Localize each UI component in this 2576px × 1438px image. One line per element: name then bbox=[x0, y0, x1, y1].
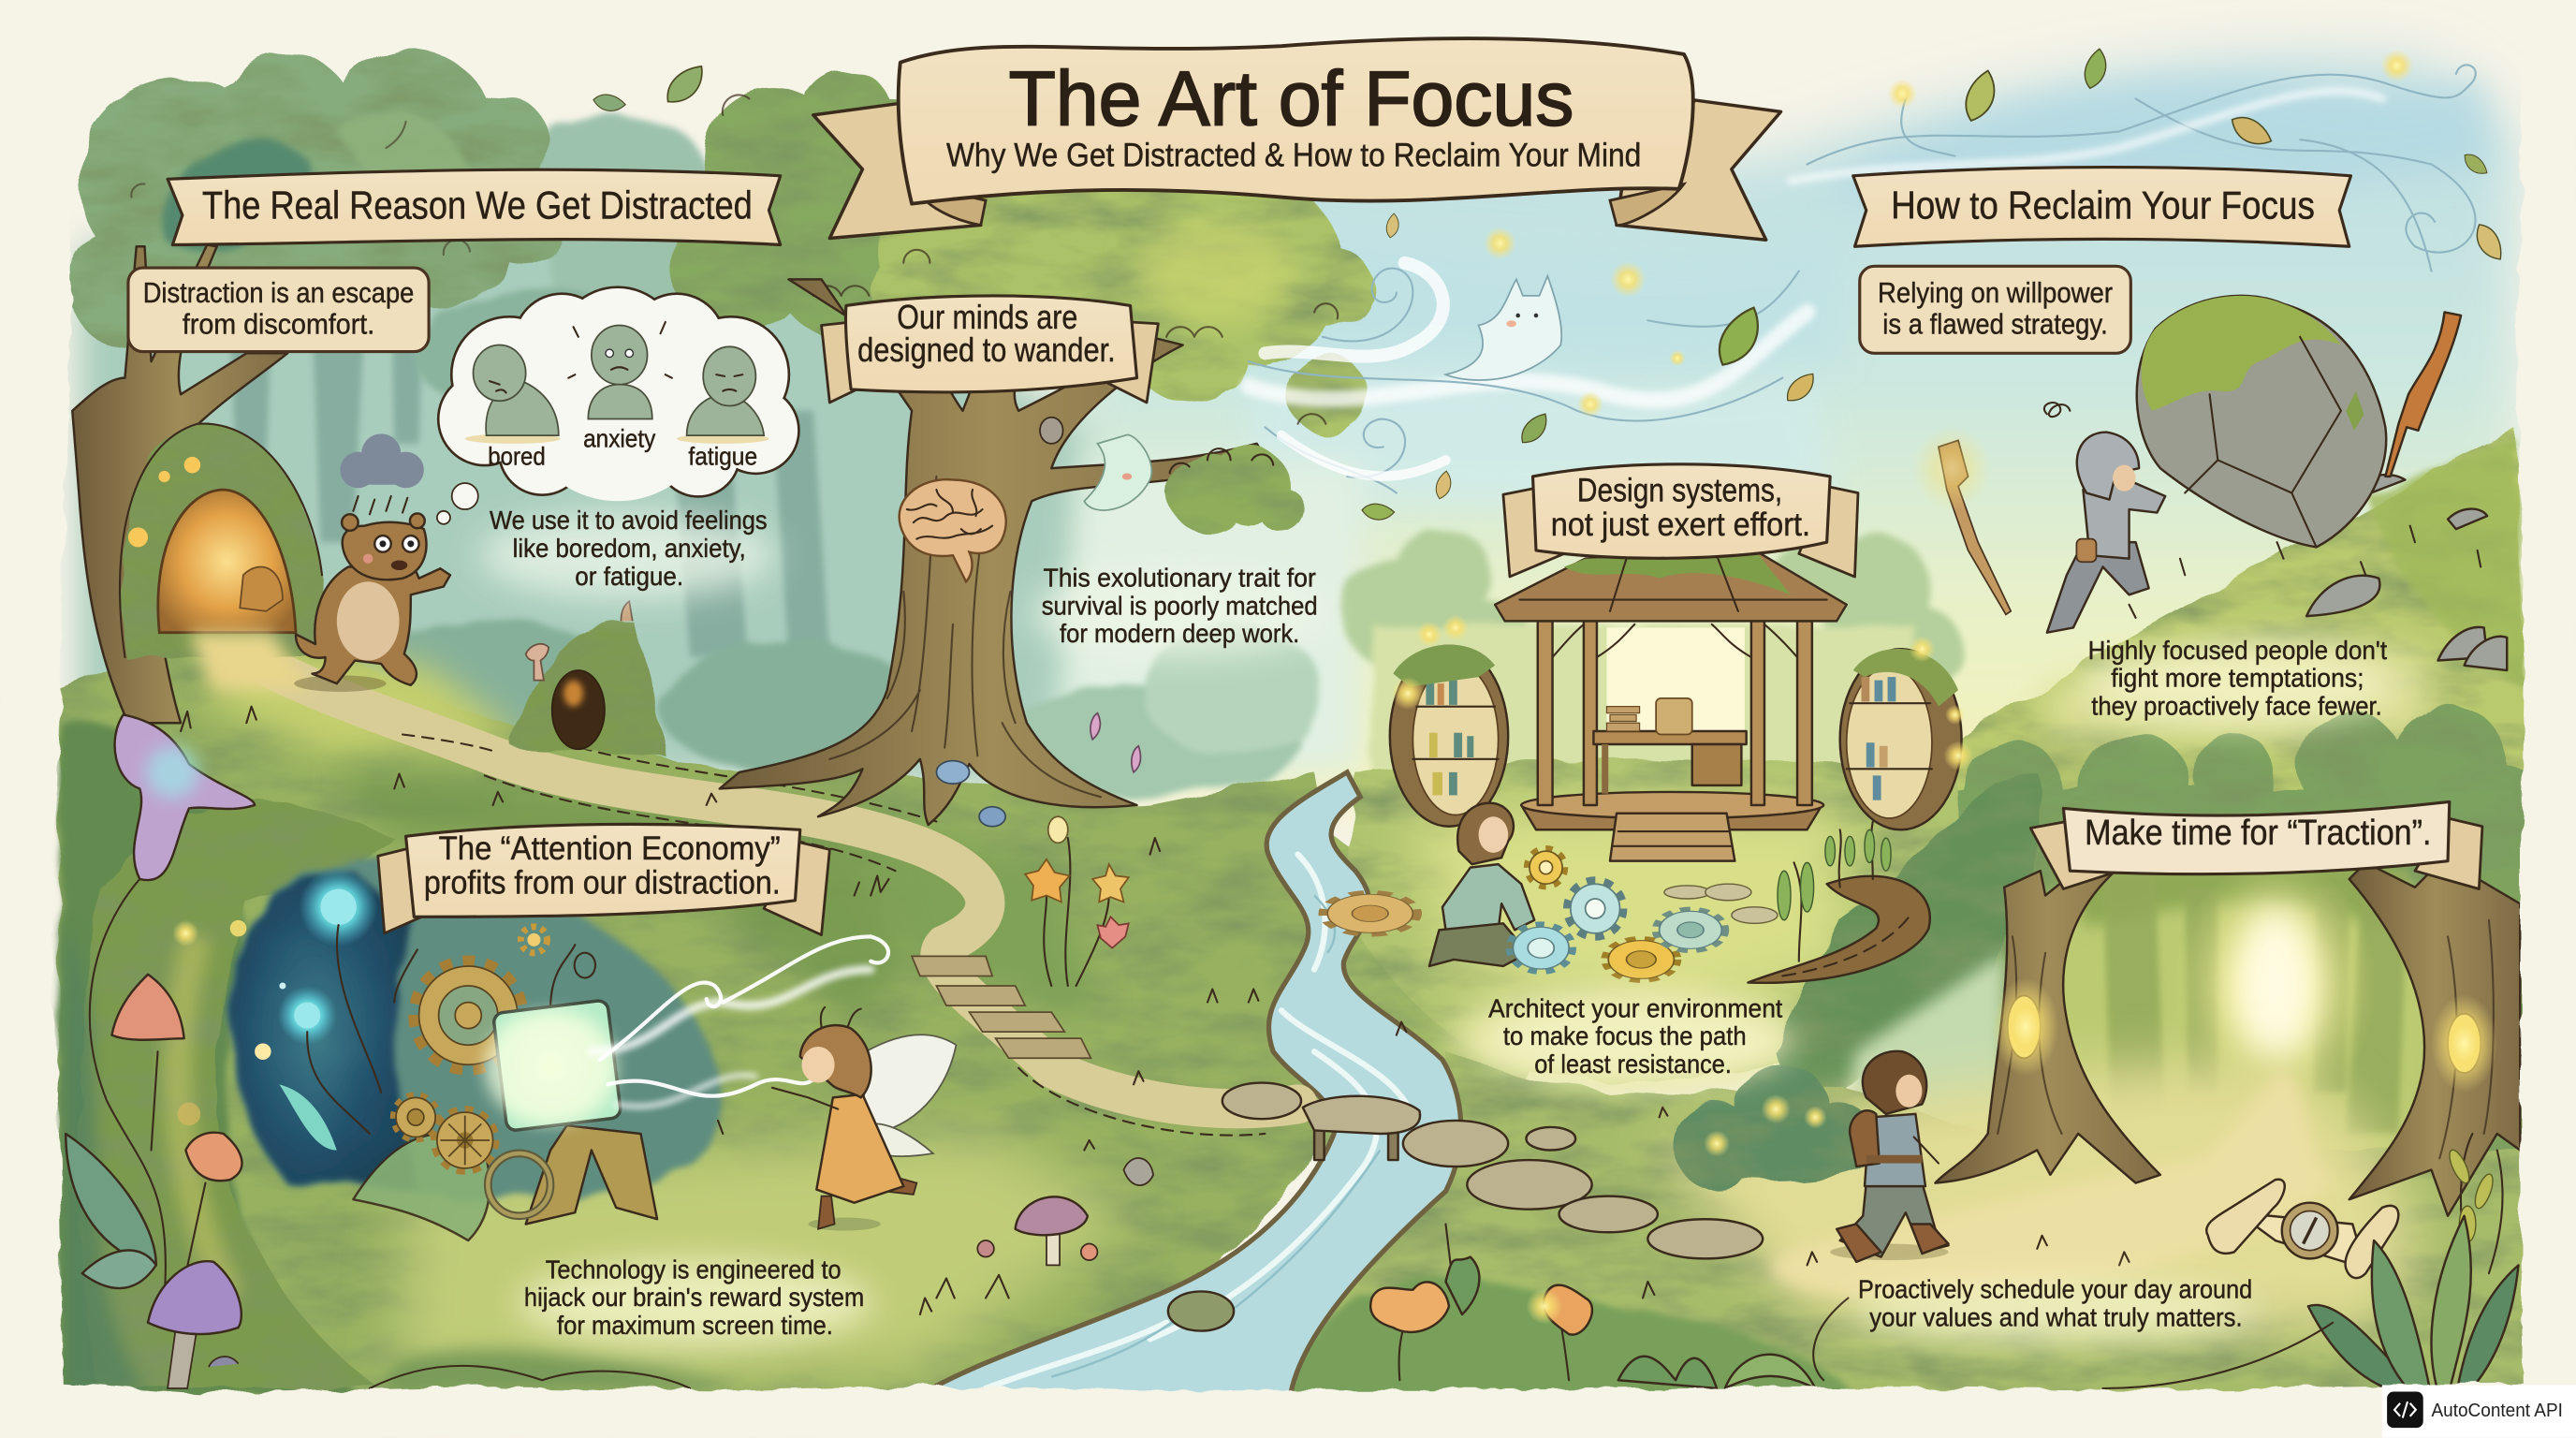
knight pushing boulder bbox=[2044, 403, 2165, 633]
gears on the ground bbox=[1325, 849, 1723, 979]
grass tufts bbox=[181, 707, 2130, 1314]
text: architect environment: Architect your environment bbox=[1488, 993, 1782, 1022]
right bookshelf bbox=[1840, 636, 1973, 829]
frightened bear bbox=[294, 513, 450, 692]
title text: The Art of Focus bbox=[1009, 55, 1573, 141]
forest gateway backdrop bbox=[1939, 858, 2522, 1216]
left tree canopy bbox=[69, 50, 562, 350]
left bookshelf bbox=[1390, 614, 1508, 827]
text: schedule your day bbox=[1858, 1274, 2252, 1331]
banner: minds wander bbox=[822, 296, 1158, 403]
text: evolutionary trait bbox=[1042, 564, 1318, 648]
left tree bbox=[72, 244, 287, 723]
boulder on the hill bbox=[2137, 296, 2386, 547]
text halos bbox=[480, 513, 2395, 1345]
banner: attention economy: profits from our distraction. bbox=[424, 865, 781, 902]
garden bed with sprouts bbox=[1664, 822, 1930, 983]
text: avoid feelings: like boredom, anxiety, bbox=[513, 534, 746, 563]
text: avoid feelings: We use it to avoid feelings bbox=[490, 506, 768, 535]
wind stream bbox=[1249, 65, 2476, 493]
feeling labels: bored bbox=[488, 442, 546, 471]
callout: willpower: Relying on willpower bbox=[1878, 276, 2113, 309]
swirling light streams bbox=[592, 936, 888, 1107]
section heading: reclaim focus bbox=[1853, 168, 2351, 246]
figure: anxiety bbox=[568, 322, 672, 419]
callout: willpower bbox=[1860, 266, 2130, 353]
brain on the trunk bbox=[900, 479, 1006, 581]
attention machine with screen bbox=[353, 927, 657, 1240]
section heading: reclaim focus: How to Reclaim Your Focus bbox=[1891, 183, 2315, 227]
text: architect environment: of least resistance. bbox=[1534, 1049, 1732, 1078]
large leaves lower right bbox=[2102, 1134, 2519, 1397]
sky wash bbox=[1035, 59, 2522, 822]
feeling labels: anxiety bbox=[583, 423, 656, 452]
center clearing ground bbox=[1314, 760, 2040, 1151]
text: architect environment: to make focus the path bbox=[1503, 1021, 1747, 1050]
badge: AutoContent API bbox=[2382, 1385, 2576, 1438]
fairy bbox=[772, 1007, 956, 1231]
mossy tree trunk bbox=[66, 800, 690, 1393]
callout: escape from discomfort: from discomfort. bbox=[183, 307, 374, 340]
text: evolutionary trait: for modern deep work. bbox=[1060, 619, 1299, 648]
text: schedule your day: your values and what truly matters. bbox=[1869, 1302, 2243, 1331]
feeling labels: fatigue bbox=[688, 442, 757, 471]
callout: willpower: is a flawed strategy. bbox=[1882, 307, 2108, 340]
text: focused people bbox=[2088, 636, 2387, 720]
broken staffs bbox=[1912, 312, 2461, 614]
left edge fantasy plants bbox=[66, 714, 255, 1388]
flowers near the steps bbox=[936, 713, 1140, 986]
dark cave with orbs bbox=[229, 861, 719, 1199]
glowing sparkles bbox=[1484, 50, 2413, 418]
text: evolutionary trait: This exolutionary trait for bbox=[1044, 564, 1316, 593]
banner: attention economy: The “Attention Economy” bbox=[439, 830, 781, 867]
banner: design systems bbox=[1503, 464, 1858, 577]
text: focused people: they proactively face fewer. bbox=[2091, 691, 2382, 720]
lower right ground bbox=[1265, 1051, 2522, 1397]
text: focused people: Highly focused people don't bbox=[2088, 636, 2387, 665]
gateway trees bbox=[1935, 855, 2520, 1216]
branch foliage bbox=[1168, 446, 1305, 533]
banner: design systems: Design systems, bbox=[1577, 472, 1782, 508]
text: technology hijack: Technology is engineered to bbox=[546, 1255, 842, 1284]
falling leaves bbox=[592, 48, 2502, 526]
figure: bored bbox=[465, 345, 561, 444]
left ground bbox=[59, 640, 1364, 1397]
banner: design systems: not just exert effort. bbox=[1551, 506, 1810, 543]
text: architect environment bbox=[1488, 993, 1782, 1078]
banner: minds wander: Our minds are bbox=[897, 298, 1077, 336]
figure: fatigue bbox=[677, 346, 768, 444]
glowing hollow bbox=[120, 424, 329, 690]
misty forest backdrop bbox=[79, 115, 1364, 797]
wandering spirit on branch bbox=[1084, 434, 1151, 510]
section heading: real reason bbox=[168, 169, 781, 244]
text: schedule your day: Proactively schedule your day around bbox=[1858, 1274, 2252, 1303]
middle tree canopy bbox=[670, 69, 1373, 433]
main title banner bbox=[813, 38, 1781, 240]
callout: escape from discomfort: Distraction is an escape bbox=[143, 276, 414, 309]
text: technology hijack bbox=[524, 1255, 864, 1340]
banner: traction: Make time for “Traction”. bbox=[2085, 813, 2431, 852]
banner: attention economy bbox=[378, 824, 829, 935]
text: avoid feelings: or fatigue. bbox=[575, 562, 683, 591]
text: avoid feelings bbox=[490, 506, 768, 591]
boy walking bbox=[1830, 1051, 1949, 1262]
ghost spirit bbox=[1445, 276, 1561, 380]
text: evolutionary trait: survival is poorly matched bbox=[1042, 591, 1318, 620]
dark hedge above the forest bbox=[1955, 705, 2545, 969]
banner: minds wander: designed to wander. bbox=[857, 330, 1116, 369]
callout: escape from discomfort bbox=[128, 268, 429, 352]
river bbox=[912, 772, 1461, 1400]
bottom orange flowers bbox=[1370, 1224, 1848, 1388]
small burrow bbox=[513, 601, 666, 756]
text: technology hijack: for maximum screen time. bbox=[557, 1311, 833, 1340]
subtitle text: Why We Get Distracted & How to Reclaim Your Mind bbox=[946, 137, 1641, 173]
thought cloud with feelings bbox=[437, 286, 800, 524]
section heading: real reason: The Real Reason We Get Distracted bbox=[202, 183, 753, 227]
mushroom cluster bbox=[936, 1158, 1153, 1298]
distant trees behind gazebo bbox=[1344, 529, 1963, 772]
text: technology hijack: hijack our brain's reward system bbox=[524, 1283, 864, 1312]
woman placing gears bbox=[1429, 803, 1534, 966]
feeling labels bbox=[488, 423, 757, 471]
map and compass bbox=[2206, 1180, 2398, 1278]
text: focused people: fight more temptations; bbox=[2111, 664, 2364, 693]
hedge bush bbox=[1674, 1064, 1873, 1190]
banner: traction bbox=[2030, 801, 2482, 888]
stepping stones bbox=[1222, 1083, 1763, 1258]
badge: AutoContent API: AutoContent API bbox=[2431, 1401, 2563, 1421]
winding dirt path bbox=[230, 644, 1298, 1136]
main tree with brain bbox=[720, 279, 1265, 825]
right hillside bbox=[1906, 431, 2530, 855]
gazebo bbox=[1495, 552, 1847, 861]
rain cloud bbox=[340, 433, 424, 514]
